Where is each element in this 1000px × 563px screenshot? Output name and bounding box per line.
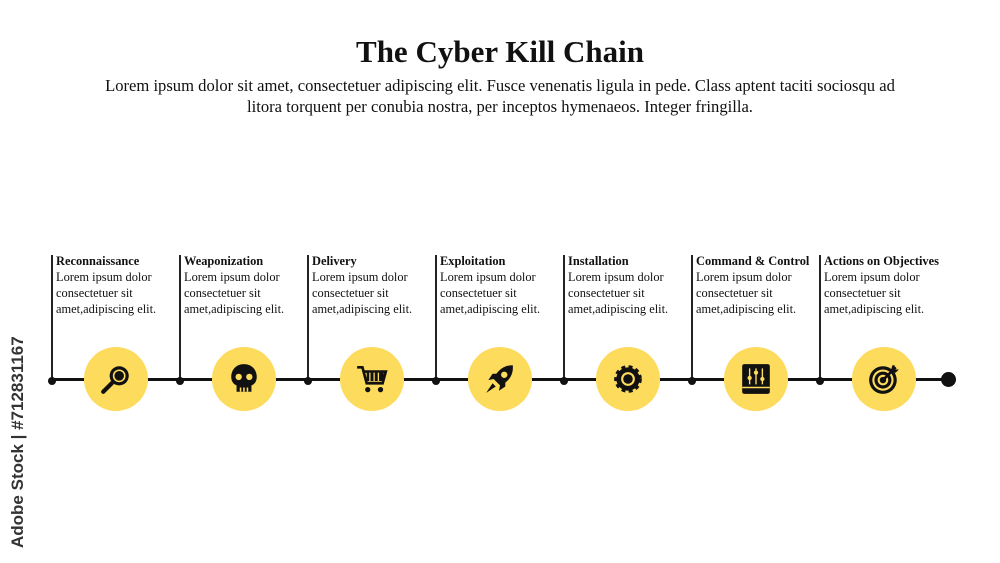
step 7 text: Actions on Objectives	[824, 254, 939, 268]
step 5 text: Lorem ipsum dolor	[568, 270, 664, 284]
step 2 text: Weaponization	[184, 254, 263, 268]
step 7 text	[824, 254, 939, 316]
subtitle: litora torquent per conubia nostra, per inceptos hymenaeos. Integer fringilla.	[247, 97, 753, 116]
step 4 text: Lorem ipsum dolor	[440, 270, 536, 284]
step 5 text: consectetuer sit	[568, 286, 645, 300]
step 1 text: consectetuer sit	[56, 286, 133, 300]
step 2 text: Lorem ipsum dolor	[184, 270, 280, 284]
step 7 text: Lorem ipsum dolor	[824, 270, 920, 284]
icon: skull	[212, 347, 276, 411]
icon: magnifier	[84, 347, 148, 411]
step 7 text: amet,adipiscing elit.	[824, 302, 924, 316]
step 1 text	[56, 254, 156, 316]
step 6 text: consectetuer sit	[696, 286, 773, 300]
step 5 text	[568, 254, 668, 316]
step 4 text: Exploitation	[440, 254, 505, 268]
icon: gear	[596, 347, 660, 411]
step 6 text: amet,adipiscing elit.	[696, 302, 796, 316]
step 6 text: Lorem ipsum dolor	[696, 270, 792, 284]
step 4 text	[440, 254, 540, 316]
icon: cart	[340, 347, 404, 411]
title: The Cyber Kill Chain	[356, 34, 644, 69]
step 3 text: consectetuer sit	[312, 286, 389, 300]
step 3 text	[312, 254, 412, 316]
subtitle	[105, 76, 895, 116]
step 2 text: amet,adipiscing elit.	[184, 302, 284, 316]
step 3 text: amet,adipiscing elit.	[312, 302, 412, 316]
icon: target	[852, 347, 916, 411]
step 2 text	[184, 254, 284, 316]
step 2 text: consectetuer sit	[184, 286, 261, 300]
icon: control panel	[724, 347, 788, 411]
step 6 text: Command & Control	[696, 254, 809, 268]
subtitle: Lorem ipsum dolor sit amet, consectetuer adipiscing elit. Fusce venenatis ligula in pede. Class aptent taciti sociosqu ad	[105, 76, 895, 95]
step 1 text: Reconnaissance	[56, 254, 139, 268]
step 4 text: consectetuer sit	[440, 286, 517, 300]
icon: rocket	[468, 347, 532, 411]
step 4 text: amet,adipiscing elit.	[440, 302, 540, 316]
step 5 text: amet,adipiscing elit.	[568, 302, 668, 316]
step 1 text: amet,adipiscing elit.	[56, 302, 156, 316]
step 3 text: Delivery	[312, 254, 357, 268]
step 7 text: consectetuer sit	[824, 286, 901, 300]
watermark: Adobe Stock | #712831167	[8, 336, 27, 548]
step 6 text	[696, 254, 810, 316]
step 1 text: Lorem ipsum dolor	[56, 270, 152, 284]
step 5 text: Installation	[568, 254, 629, 268]
step 3 text: Lorem ipsum dolor	[312, 270, 408, 284]
